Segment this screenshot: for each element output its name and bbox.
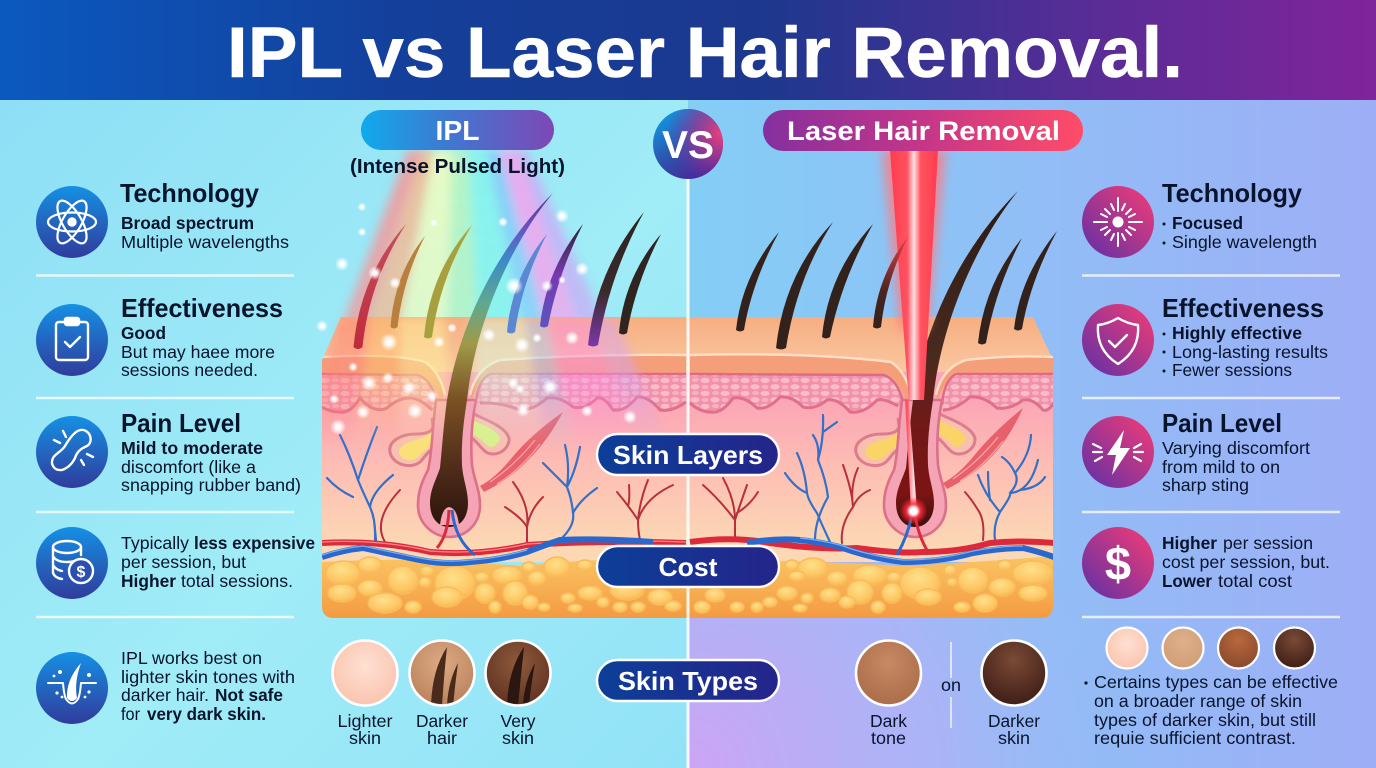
center pill: Skin Types: Skin Types (618, 666, 758, 696)
icon: shield (1082, 304, 1154, 376)
hair follicle: IPL side (390, 400, 563, 537)
blood vessels right (690, 415, 1054, 562)
heading and text: Good (121, 323, 166, 343)
papilla (440, 507, 459, 525)
heading and text: Broad spectrum (121, 213, 254, 233)
heading and text: But may haee more (121, 342, 275, 362)
heading and text: Technology (1162, 178, 1303, 208)
right panel: Technology (1082, 178, 1317, 258)
skin cross-section illustration (300, 317, 1054, 618)
IPL heading pill: IPL (436, 115, 480, 146)
right panel: Cost (1082, 527, 1330, 599)
center pill: Skin Layers: Skin Layers (613, 440, 763, 470)
heading and text: discomfort (like a (121, 457, 256, 477)
skin swatch: Lighter skin: skin (349, 728, 381, 748)
text: total sessions. (181, 571, 293, 591)
blood vessels left (322, 427, 686, 563)
skin swatch: Very skin: skin (502, 728, 534, 748)
icon: clipboard (36, 304, 108, 376)
Laser heading pill (763, 110, 1083, 151)
laser side small hairs (736, 222, 1057, 350)
skin swatch: Darker skin (982, 640, 1046, 748)
laser spot on hair bulb (900, 497, 928, 525)
text (121, 533, 315, 591)
text: Higher (121, 571, 176, 591)
heading and text: sharp sting (1162, 475, 1249, 495)
heading and text (1162, 408, 1310, 495)
follicle sheath (418, 400, 480, 537)
text (121, 648, 295, 724)
right panel: Effectiveness (1082, 293, 1328, 380)
center pill: Cost (597, 546, 779, 587)
glands (856, 418, 902, 466)
right panel: skin type text: on a broader range of skin (1094, 691, 1302, 711)
title banner: IPL vs Laser Hair Removal. (227, 13, 1183, 93)
title banner (0, 0, 1376, 100)
text: per session (1223, 533, 1313, 553)
VS badge: VS (662, 124, 714, 167)
text: Higher (1162, 533, 1217, 553)
text: lighter skin tones with (121, 667, 295, 687)
skin swatch: Darker skin: skin (998, 728, 1030, 748)
heading and text: Technology (120, 178, 260, 208)
center pill: Skin Layers (597, 434, 779, 475)
text: for (121, 704, 140, 724)
skin swatch: Darker hair: Darker (416, 711, 468, 731)
heading and text (121, 408, 301, 495)
skin surface layer (322, 317, 1053, 376)
sparkles (316, 202, 637, 435)
on separator: on (941, 675, 961, 695)
skin swatch: Dark tone (856, 640, 921, 748)
Laser heading pill: Laser Hair Removal (787, 116, 1060, 146)
laser beam (882, 150, 946, 510)
IPL side small hairs (354, 212, 661, 349)
IPL subtitle: (Intense Pulsed Light) (350, 156, 565, 178)
left panel: Technology (36, 178, 289, 258)
heading and text: Fewer sessions (1172, 360, 1292, 380)
icon: lightning bolt (1082, 416, 1154, 488)
text (1162, 533, 1330, 591)
icon: coins (36, 527, 108, 599)
right panel: skin type text (1084, 672, 1338, 748)
center divider (686, 150, 690, 768)
heading and text: Highly effective (1172, 323, 1302, 343)
dermis layer (322, 372, 1054, 562)
skin swatch: Lighter skin (332, 640, 398, 748)
center pill: Cost: Cost (658, 552, 718, 582)
glands (390, 418, 436, 466)
icon: atom (36, 186, 108, 258)
text: total cost (1218, 571, 1292, 591)
skin swatch: Lighter skin: Lighter (338, 711, 393, 731)
skin swatch: Very skin (486, 640, 550, 748)
heading and text: from mild to on (1162, 457, 1280, 477)
text: IPL works best on (121, 648, 262, 668)
skin swatch: Very skin: Very (500, 711, 536, 731)
center pill: Skin Types (597, 660, 779, 701)
heading and text: Multiple wavelengths (121, 232, 289, 252)
right panel: skin type text: requie sufficient contrast. (1094, 728, 1296, 748)
right panel: skin type text: types of darker skin, but still (1094, 710, 1316, 730)
heading and text (1162, 293, 1328, 380)
left panel: Pain Level (36, 408, 301, 495)
right panel: Pain Level (1082, 408, 1310, 495)
epidermis with cell pattern (322, 374, 1054, 412)
heading and text: snapping rubber band) (121, 475, 301, 495)
IPL heading pill (361, 110, 554, 150)
text: very dark skin. (147, 704, 266, 724)
icon: light burst (1082, 186, 1154, 258)
skin swatch: Darker hair (410, 640, 474, 748)
skin swatch: Dark tone: tone (871, 728, 906, 748)
right panel: skin type text: Certains types can be effective (1094, 672, 1338, 692)
laser long hair with bulb (896, 191, 1018, 555)
text: cost per session, but. (1162, 552, 1330, 572)
icon: rubber band (36, 416, 108, 488)
heading and text (121, 293, 283, 380)
left panel: Skin types (36, 648, 295, 724)
rainbow tint over IPL skin (322, 317, 655, 443)
arrector muscle (480, 412, 563, 492)
upper skin band (322, 354, 1054, 400)
text: per session, but (121, 552, 246, 572)
heading and text: Long-lasting results (1172, 342, 1328, 362)
text: less expensive (194, 533, 315, 553)
VS badge (653, 109, 723, 179)
heading and text: Single wavelength (1172, 232, 1317, 252)
icon: coins: $ (77, 564, 86, 581)
heading and text: Focused (1172, 213, 1243, 233)
text: Typically (121, 533, 189, 553)
text: Lower (1162, 571, 1212, 591)
arrector muscle (943, 408, 1023, 489)
left panel: Effectiveness (36, 293, 283, 380)
icon: dollar: $ (1105, 537, 1131, 590)
heading and text (120, 178, 289, 252)
heading and text: Effectiveness (1162, 293, 1324, 323)
light beams: IPL rainbow (338, 150, 610, 335)
IPL long hair with bulb (430, 193, 553, 555)
heading and text: Pain Level (1162, 408, 1282, 438)
fat layer (322, 556, 1054, 618)
icon: dollar (1082, 527, 1154, 599)
skin swatch: Darker hair: hair (427, 728, 457, 748)
on separator (941, 642, 961, 728)
heading and text: Varying discomfort (1162, 438, 1310, 458)
follicle sheath (884, 400, 946, 537)
heading and text (1162, 178, 1317, 252)
heading and text: Mild to moderate (121, 438, 263, 458)
heading and text: Effectiveness (121, 293, 283, 323)
text: darker hair. (121, 685, 209, 705)
icon: follicle (36, 652, 108, 724)
heading and text: sessions needed. (121, 360, 258, 380)
hair follicle: laser side (856, 400, 1023, 537)
right panel: skin tone swatches (1106, 628, 1315, 668)
skin swatch: Dark tone: Dark (870, 711, 907, 731)
text: Not safe (215, 685, 283, 705)
skin swatch: Darker skin: Darker (988, 711, 1040, 731)
left panel: Cost (36, 527, 315, 599)
heading and text: Pain Level (121, 408, 241, 438)
